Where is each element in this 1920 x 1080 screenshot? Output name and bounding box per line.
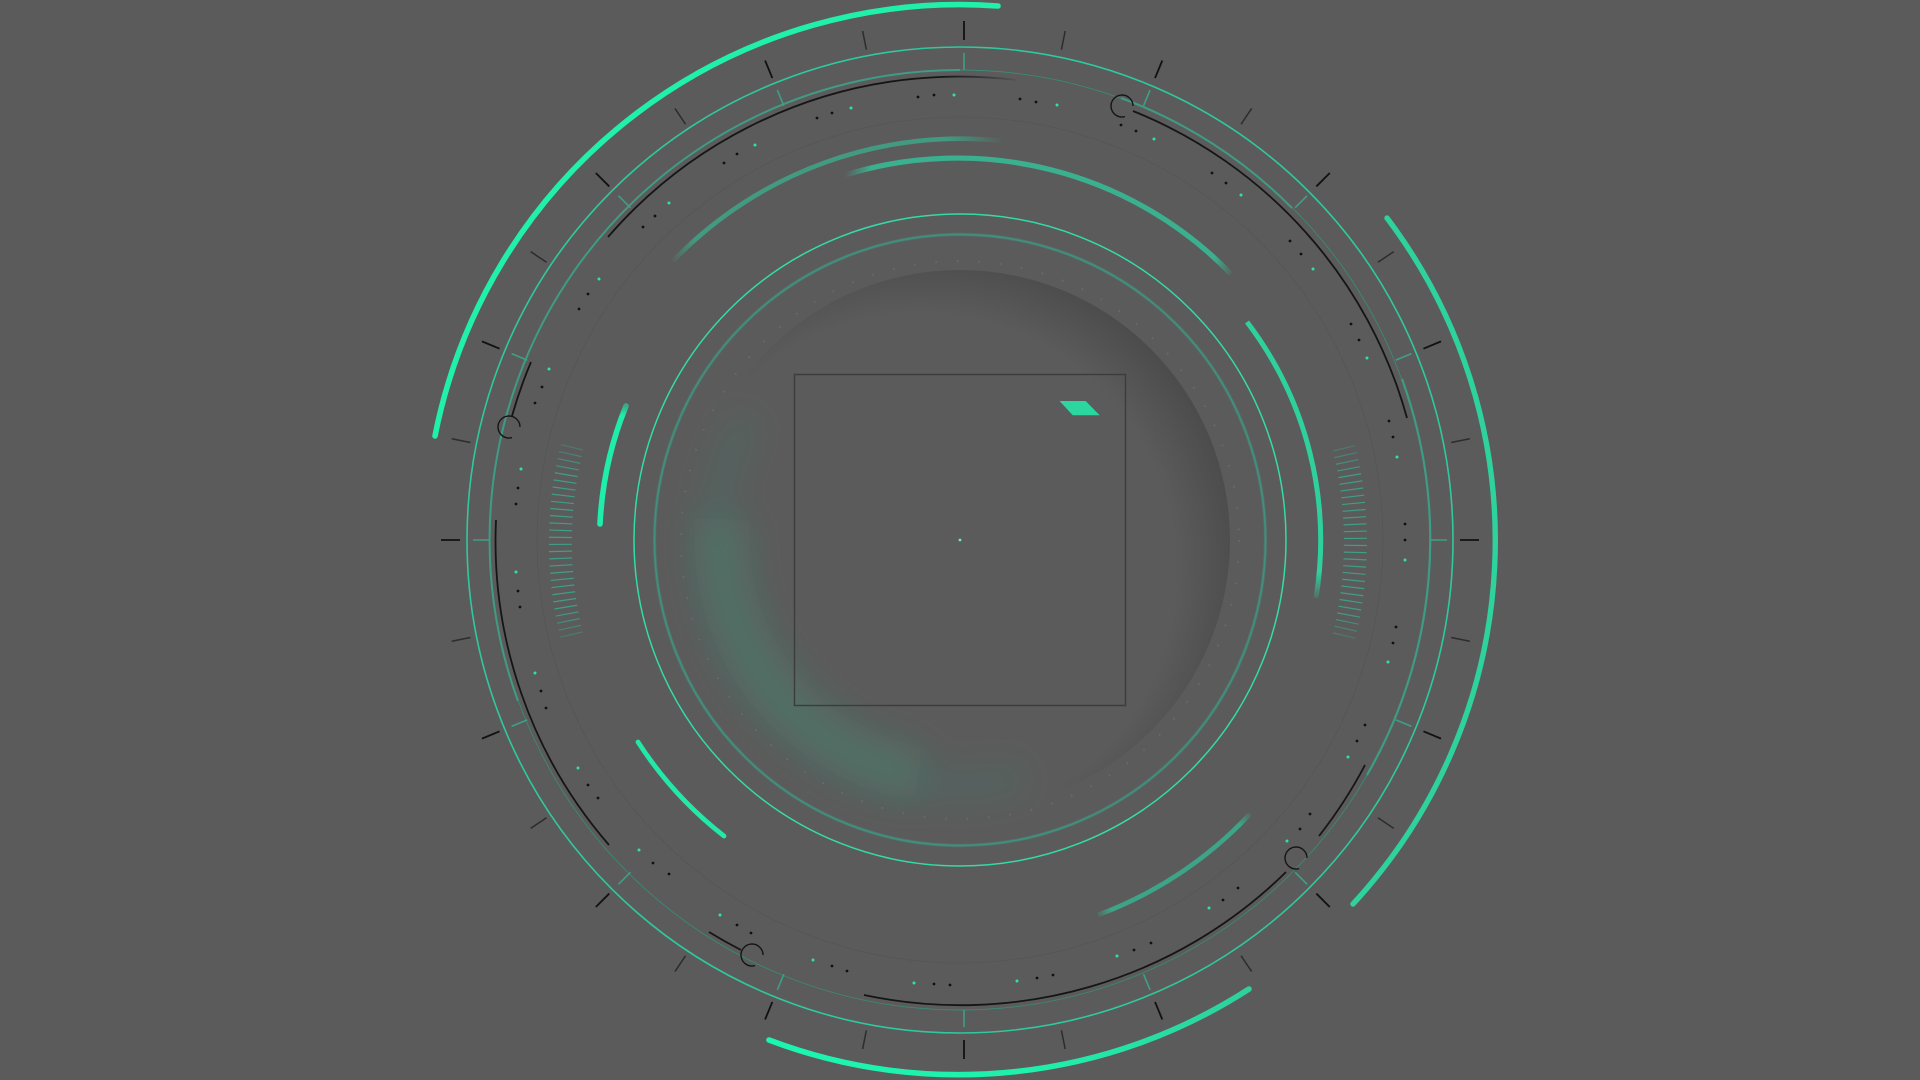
teal dots ring	[514, 94, 1406, 984]
teal bracket ticks	[473, 53, 1447, 1027]
center dot	[959, 539, 961, 541]
outer teal ring	[467, 47, 1453, 1033]
outer tick marks	[441, 21, 1479, 1059]
inner rings	[634, 214, 1286, 866]
inner arc top left	[673, 139, 1004, 261]
parallelogram marker	[1060, 401, 1100, 415]
outer arc bottom	[769, 989, 1249, 1075]
inner arc left	[600, 406, 626, 524]
black dots ring	[515, 94, 1406, 986]
inner arc top	[845, 158, 1231, 274]
faint dark ring	[537, 117, 1383, 963]
black ring segments	[496, 77, 1407, 1005]
left hatch scale	[560, 447, 572, 637]
inner square frame	[794, 374, 1126, 706]
open circle node markers	[498, 95, 1307, 966]
inner arc right	[1247, 322, 1321, 598]
outer arc right	[1353, 218, 1495, 904]
middle teal ring	[490, 70, 1430, 1010]
outer arc upper left	[435, 5, 998, 436]
right hatch scale	[1344, 448, 1355, 636]
inner arc lower left	[638, 742, 724, 836]
central disc with shading	[690, 270, 1230, 810]
inner arc lower right	[1098, 814, 1250, 915]
